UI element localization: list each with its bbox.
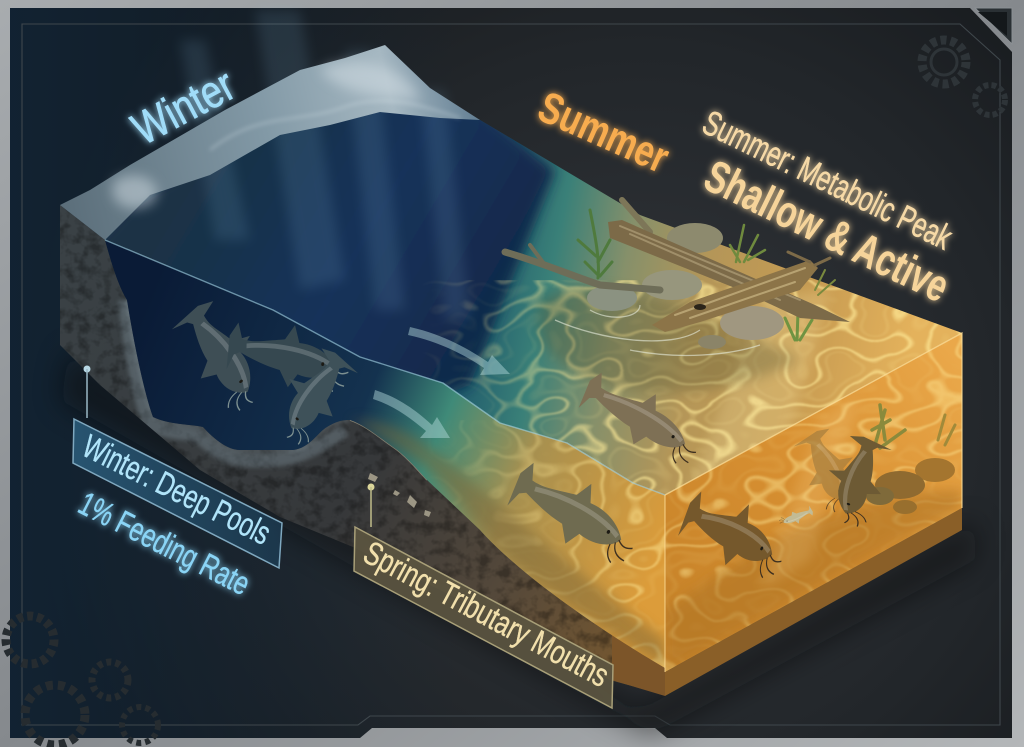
cross-section left face <box>105 240 670 670</box>
frosted bank edge <box>125 300 345 460</box>
flow arrows <box>373 327 510 438</box>
water surface <box>90 10 970 510</box>
water plants <box>578 210 955 448</box>
block shadow <box>60 350 975 735</box>
soil grain <box>60 212 616 682</box>
text: 1% Feeding Rate: 1% Feeding Rate <box>73 484 256 602</box>
winter catfish group <box>164 292 365 452</box>
light rays winter <box>180 10 470 320</box>
rocks <box>555 223 955 514</box>
title: Summer: Summer <box>531 82 676 183</box>
snowy hill <box>60 45 480 240</box>
callout: Spring Tributary Mouths: Spring: Tributary Mouths <box>358 534 615 694</box>
base strip <box>665 508 962 696</box>
gears decoration top right <box>922 40 1005 115</box>
water line <box>105 240 665 495</box>
cross-section right face <box>665 333 965 673</box>
driftwood logs <box>505 200 850 332</box>
title: Winter: Winter <box>123 58 243 155</box>
summer catfish group <box>501 364 899 585</box>
callout: Winter Deep Pools <box>73 366 282 568</box>
gears decoration bottom left <box>6 616 158 745</box>
left soil bank <box>60 205 665 695</box>
callout: Spring Tributary Mouths <box>354 484 615 708</box>
spring pebbles <box>368 473 431 517</box>
callout: Winter Deep Pools: Winter: Deep Pools <box>77 427 277 552</box>
caustics on surface <box>432 280 962 493</box>
terrain block <box>60 205 975 735</box>
